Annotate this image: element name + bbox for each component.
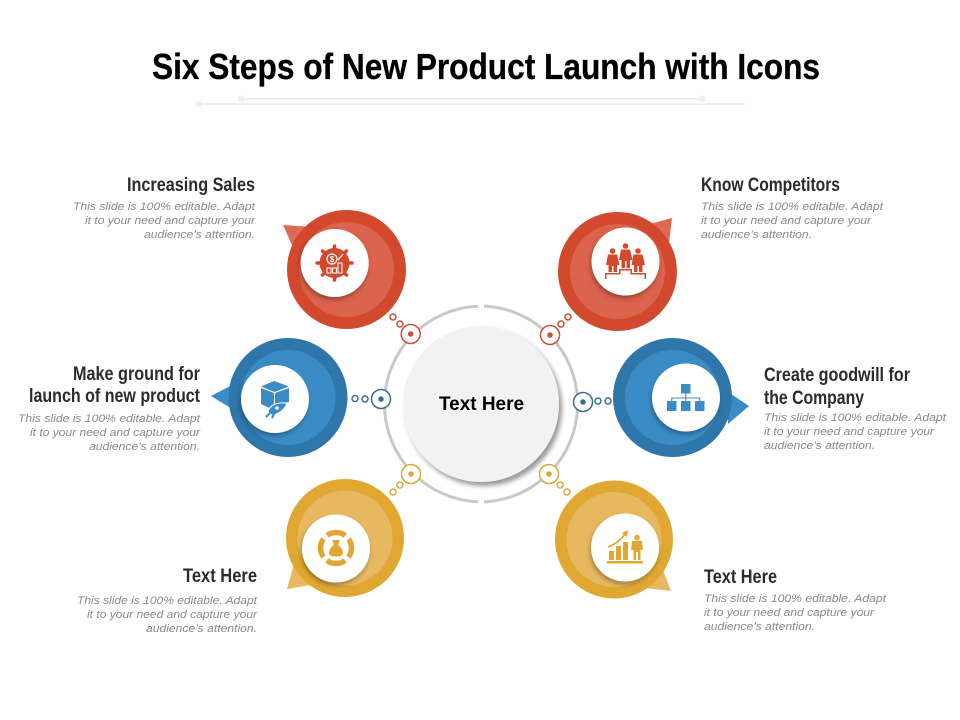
step: text here left bubble bbox=[286, 479, 404, 597]
text: create goodwill: the Company bbox=[764, 388, 864, 409]
text: create goodwill bbox=[764, 365, 947, 452]
text: text here left: Text Here bbox=[183, 566, 257, 587]
text: text here left: This slide is 100% editable. Adapt bbox=[77, 595, 258, 607]
text: create goodwill: audience’s attention. bbox=[764, 440, 875, 452]
step: make ground bubble bbox=[211, 338, 348, 457]
text: create goodwill: This slide is 100% editable. Adapt bbox=[764, 412, 947, 424]
text: know competitors: audience’s attention. bbox=[701, 229, 812, 241]
icon: gear with dollar and chart: $ bbox=[330, 255, 335, 264]
center label: Text Here bbox=[439, 394, 524, 415]
text: text here right: This slide is 100% editable. Adapt bbox=[704, 593, 887, 605]
text: know competitors bbox=[701, 175, 884, 241]
text: increasing sales: it to your need and capture your bbox=[85, 215, 256, 227]
step: increasing sales bubble bbox=[283, 210, 406, 329]
text: text here right: Text Here bbox=[704, 567, 777, 588]
center hub bbox=[384, 306, 578, 502]
text: make ground: This slide is 100% editable. Adapt bbox=[18, 413, 201, 425]
text: know competitors: This slide is 100% editable. Adapt bbox=[701, 201, 884, 213]
title underline decoration bbox=[196, 96, 745, 108]
text: increasing sales: This slide is 100% editable. Adapt bbox=[73, 201, 256, 213]
text: know competitors: Know Competitors bbox=[701, 175, 840, 196]
text: text here right bbox=[704, 567, 887, 633]
text: make ground: it to your need and capture your bbox=[30, 427, 201, 439]
text: make ground: audience’s attention. bbox=[89, 441, 200, 453]
text: create goodwill: it to your need and capture your bbox=[764, 426, 935, 438]
icon: growth chart and person bbox=[607, 530, 643, 564]
step: create goodwill bubble bbox=[613, 338, 749, 457]
icon: box and rocket bbox=[261, 381, 289, 418]
text: make ground bbox=[18, 364, 201, 453]
text: create goodwill: Create goodwill for bbox=[764, 365, 911, 386]
connector: create goodwill bbox=[574, 392, 611, 412]
text: text here right: it to your need and capture your bbox=[704, 607, 875, 619]
icon: money bag in ring bbox=[320, 532, 352, 564]
icon: org chart bbox=[667, 384, 704, 411]
icon: people on podium bbox=[605, 243, 646, 279]
text: increasing sales: audience’s attention. bbox=[144, 229, 255, 241]
connector: text here right bbox=[540, 464, 570, 495]
text: know competitors: it to your need and capture your bbox=[701, 215, 872, 227]
step: know competitors bubble bbox=[558, 212, 677, 331]
title: Six Steps of New Product Launch with Icons bbox=[152, 46, 820, 87]
text: text here left bbox=[77, 566, 258, 635]
text: text here left: it to your need and capture your bbox=[87, 609, 258, 621]
connector: know competitors bbox=[540, 314, 571, 344]
text: text here right: audience’s attention. bbox=[704, 621, 815, 633]
text: make ground: launch of new product bbox=[29, 386, 201, 407]
text: increasing sales: Increasing Sales bbox=[127, 175, 255, 196]
step: text here right bubble bbox=[555, 480, 673, 598]
text: text here left: audience’s attention. bbox=[146, 623, 257, 635]
connector: increasing sales bbox=[390, 314, 420, 344]
text: make ground: Make ground for bbox=[73, 364, 201, 385]
connector: text here left bbox=[390, 464, 420, 495]
text: increasing sales bbox=[73, 175, 256, 241]
connector: make ground bbox=[352, 390, 390, 408]
